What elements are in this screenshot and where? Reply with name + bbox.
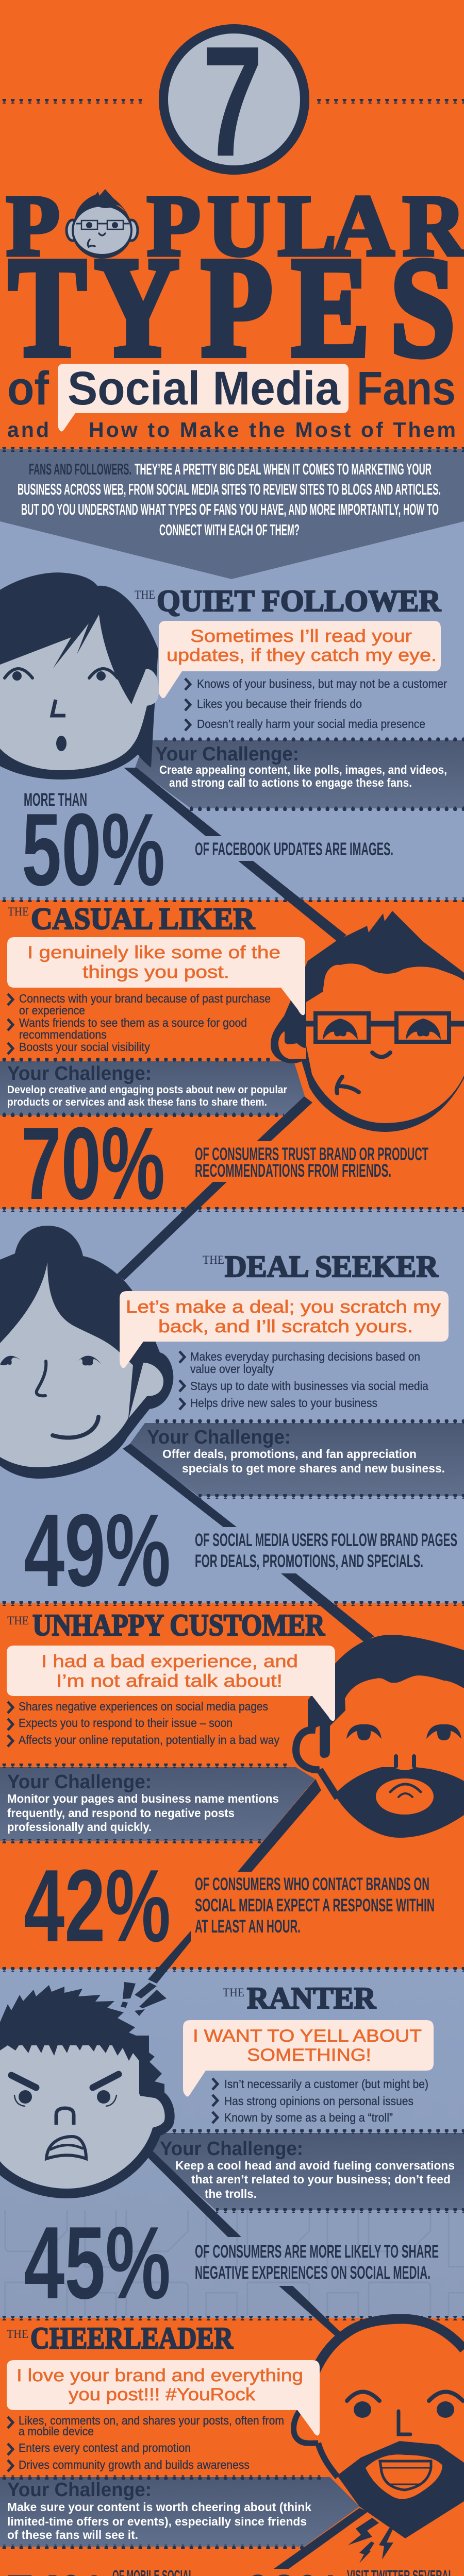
header: number 7 badge [0,13,464,189]
bullet list: Likes, comments on, and shares your posts, often from [19,2414,284,2427]
challenge text: frequently, and respond to negative posts [7,1806,235,1820]
challenge text [7,1063,287,1108]
bullet list: Known by some as a being a “troll” [224,2111,393,2124]
bullet list: Knows of your business, but may not be a customer [197,677,447,690]
stat: 42% [24,1849,435,1963]
stat: 45% [24,2206,439,2320]
speech bubble [7,2360,320,2435]
challenge text: Keep a cool head and avoid fueling conversations [175,2159,455,2172]
stat: 45%: 45% [24,2206,171,2320]
stat: 70% [21,1106,428,1221]
stat: 42%: 42% [24,1849,171,1963]
challenge text: Develop creative and engaging posts about new or popular [7,1084,287,1096]
intro text: CONNECT WITH EACH OF THEM? [159,521,300,539]
heading: THE [203,1253,224,1266]
speech bubble: back, and I’ll scratch yours. [158,1317,413,1336]
stat: more than 50%: 50% [22,792,165,907]
icon: header face with glasses [67,189,138,259]
section: the deal seeker [0,1226,464,1608]
bullet list: Stays up to date with businesses via social media [190,1379,428,1393]
subtitle: of Social Media Fans: Social Media [68,362,341,415]
speech bubble: you post!!! #YouRock [69,2385,256,2404]
speech bubble: SOMETHING! [247,2045,371,2065]
title word: TYPES: TYPES [8,228,455,386]
stat: more than 50% [22,790,393,907]
speech bubble: updates, if they catch my eye. [167,646,437,665]
bullet list: Connects with your brand because of past purchase [19,992,271,1005]
challenge text: Offer deals, promotions, and fan appreciation [162,1447,417,1461]
icon: lightning bolts [348,2518,393,2563]
section: the cheerleader [0,2319,464,2576]
connector line: section 2 to deal seeker [117,1182,227,1280]
challenge text: limited-time offers or events), especially since friends [7,2515,307,2528]
bullet list: Drives community growth and builds awareness [19,2458,250,2471]
bullet list: Doesn’t really harm your social media presence [197,717,425,731]
speech bubble: I’m not afraid talk about! [56,1671,283,1691]
bullet list: or experience [19,1004,85,1017]
challenge text [160,2138,455,2200]
face: casual liker [271,911,464,1132]
connector line: section 4 to ranter [148,1931,191,1984]
heading: THE [223,1986,244,1999]
connector line: section 1 to casual liker [238,861,346,942]
bullet list [8,1700,279,1747]
challenge text: Your Challenge: [7,1771,152,1793]
challenge text: Make sure your content is worth cheering about (think [7,2500,311,2514]
challenge text [155,743,447,789]
connector line to challenge [124,768,222,836]
section: the casual liker [0,902,464,1221]
section: the unhappy customer [0,1608,464,1963]
bullet list: Has strong opinions on personal issues [224,2094,413,2108]
bullet list [179,1350,428,1410]
challenge band background [0,1061,305,1115]
challenge band background [135,740,464,808]
challenge text: Your Challenge: [7,1063,152,1084]
challenge text: products or services and ask these fans to share them. [7,1096,267,1108]
bullet list: value over loyalty [190,1362,274,1376]
intro text: FANS AND FOLLOWERS. [29,460,131,478]
challenge text [147,1427,445,1475]
speech bubble [183,2020,434,2097]
face: quiet follower [0,572,159,779]
challenge text [7,2479,311,2541]
bullet list: Boosts your social visibility [19,1040,150,1054]
subtitle: and How to Make the Most of Them: and [7,418,49,442]
bullet list: recommendations [19,1028,107,1041]
stat: more than 50%: MORE THAN [24,790,87,810]
stat: 70%: 70% [21,1106,165,1221]
speech bubble: Sometimes I’ll read your [190,626,412,646]
face: deal seeker [0,1226,173,1479]
challenge text [7,1771,279,1834]
face: unhappy customer [296,1635,464,1838]
heading: QUIET FOLLOWER [157,584,441,618]
section: the quiet follower [0,572,464,907]
bullet list: Helps drive new sales to your business [190,1396,377,1410]
bullet list: Isn’t necessarily a customer (but might be) [224,2077,428,2091]
heading: THE [8,905,29,918]
bullet list: Shares negative experiences on social media pages [19,1700,268,1713]
challenge text: Your Challenge: [155,743,299,765]
connector line: section 3 to unhappy customer [281,1573,374,1642]
challenge band background [0,2477,359,2547]
challenge text: professionally and quickly. [7,1820,152,1834]
stat: 49%: 49% [24,1493,171,1608]
heading: CHEERLEADER [30,2321,234,2355]
speech bubble: I had a bad experience, and [41,1652,298,1671]
challenge text: specials to get more shares and new business. [182,1462,445,1475]
speech bubble around Social Media [58,364,349,432]
heading: DEAL SEEKER [225,1249,439,1283]
bullet list [212,2077,428,2124]
challenge text: Your Challenge: [147,1427,291,1448]
heading: CASUAL LIKER [31,902,255,936]
subtitle: of Social Media Fans: of [7,362,49,415]
heading: THE [135,588,155,601]
bullet list: Enters every contest and promotion [19,2441,191,2454]
challenge band background [129,1423,464,1496]
challenge text: Monitor your pages and business name mentions [7,1792,279,1805]
bullet list [8,992,271,1054]
heading: THE [7,2328,28,2341]
speech bubble: I love your brand and everything [16,2366,303,2385]
speech bubble: Let’s make a deal; you scratch my [126,1297,441,1317]
speech bubble: things you post. [82,962,229,982]
subtitle: and How to Make the Most of Them: How to Make the Most of Them [89,418,456,442]
challenge text: that aren’t related to your business; don’t feed [191,2173,451,2186]
challenge band background [150,2133,464,2210]
bullet list: Likes you because their friends do [197,697,362,710]
challenge text: Your Challenge: [160,2138,303,2160]
bullet list: Makes everyday purchasing decisions based on [190,1350,420,1363]
intro panel [0,447,464,579]
face: cheerleader [294,2319,464,2563]
bullet list [8,2414,284,2471]
connector line to challenge [146,2149,241,2237]
connector line from face [238,1779,321,1872]
challenge text: of these fans will see it. [7,2528,138,2541]
subtitle: of Social Media Fans [7,362,456,432]
stat: 49% [24,1493,457,1608]
intro text [18,460,441,539]
bullet list: Affects your online reputation, potentially in a bad way [19,1733,279,1747]
bullet list [185,677,447,731]
bullet list: Wants friends to see them as a source for good [19,1016,247,1029]
speech bubble [7,937,305,1015]
heading: RANTER [247,1981,376,2015]
speech bubble: I genuinely like some of the [27,943,280,962]
face: ranter [0,1982,167,2189]
speech bubble [7,1646,335,1721]
heading: UNHAPPY CUSTOMER [32,1608,325,1642]
stat: 63% [243,2561,454,2576]
speech bubble [120,1291,449,1368]
speech bubble [159,621,441,698]
connector line: section 5 to cheerleader [279,2286,343,2339]
bullet list: a mobile device [19,2425,94,2438]
connector line to challenge [274,2508,368,2569]
speech bubble: I WANT TO YELL ABOUT [193,2026,422,2046]
challenge text: and strong call to actions to engage these fans. [169,776,412,789]
section: the ranter [0,1981,464,2320]
header: number 7 badge: 7 [202,13,263,189]
connector line from face [257,1096,312,1141]
title word: POPULAR: POPULAR [6,177,464,274]
challenge text: Your Challenge: [7,2479,152,2501]
stat: 42%: AT LEAST AN HOUR. [195,1917,301,1937]
connector line to challenge [123,1444,237,1527]
challenge band background [0,1767,315,1841]
bullet list: Expects you to respond to their issue – soon [19,1716,233,1730]
heading: THE [7,1614,29,1627]
challenge text: the trolls. [205,2187,257,2200]
